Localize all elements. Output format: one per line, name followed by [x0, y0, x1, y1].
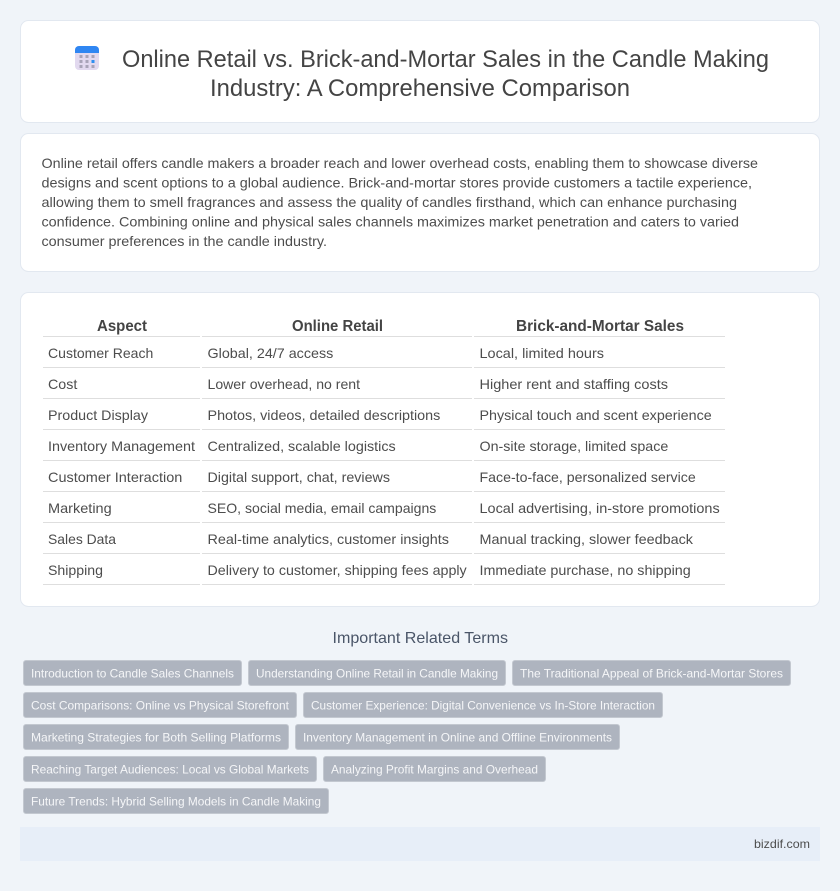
row: product display: Photos, videos, detailed descriptions — [208, 407, 440, 423]
tag — [24, 692, 296, 718]
tag: Reaching Target Audiences: Local vs Global Markets — [31, 762, 309, 776]
summary paragraph: designs and scent options to a global audience. Brick-and-mortar stores provide customers a tactile experience, — [42, 174, 752, 190]
summary paragraph: allowing them to smell fragrances and assess the quality of candles firsthand, which can enhance purchasing — [42, 194, 737, 210]
row: cost: Cost — [48, 376, 77, 392]
row: customer reach: Global, 24/7 access — [208, 345, 333, 361]
row: inventory management: Inventory Management — [48, 438, 195, 454]
title — [122, 46, 769, 102]
tag — [512, 660, 790, 686]
row: cost: Lower overhead, no rent — [208, 376, 360, 392]
row: customer interaction — [43, 469, 725, 492]
row: marketing: Local advertising, in-store promotions — [480, 500, 720, 516]
tag: Inventory Management in Online and Offline Environments — [303, 730, 612, 744]
row: shipping — [43, 562, 725, 585]
tag — [248, 660, 506, 686]
row: marketing — [43, 500, 725, 523]
tag: Cost Comparisons: Online vs Physical Storefront — [31, 698, 290, 712]
row: inventory management — [43, 438, 725, 461]
tag: Analyzing Profit Margins and Overhead — [331, 762, 538, 776]
panel: comparison table — [20, 292, 820, 606]
row: shipping: Shipping — [48, 562, 103, 578]
panel: header — [20, 20, 820, 122]
row: customer interaction: Face-to-face, personalized service — [480, 469, 696, 485]
tag: Understanding Online Retail in Candle Making — [256, 666, 498, 680]
row: customer reach — [43, 345, 725, 368]
summary paragraph: Online retail offers candle makers a broader reach and lower overhead costs, enabling them to showcase diverse — [42, 155, 758, 171]
tag: Introduction to Candle Sales Channels — [31, 666, 234, 680]
row: customer reach: Customer Reach — [48, 345, 153, 361]
footer bar — [20, 827, 820, 861]
table header row: Online Retail — [292, 318, 383, 335]
tag — [24, 756, 316, 782]
row: customer reach: Local, limited hours — [480, 345, 604, 361]
row: sales data: Manual tracking, slower feedback — [480, 531, 694, 547]
table header row: Aspect — [97, 318, 148, 335]
tag: Marketing Strategies for Both Selling Platforms — [31, 730, 281, 744]
row: inventory management: Centralized, scalable logistics — [208, 438, 396, 454]
heading: important related terms: Important Related Terms — [332, 630, 508, 647]
row: shipping: Delivery to customer, shipping fees apply — [208, 562, 467, 578]
row: product display: Product Display — [48, 407, 148, 423]
panel: summary text — [20, 134, 820, 272]
title: Online Retail vs. Brick-and-Mortar Sales in the Candle Making — [122, 46, 769, 73]
tag — [324, 756, 546, 782]
row: shipping: Immediate purchase, no shipping — [480, 562, 691, 578]
row: product display: Physical touch and scent experience — [480, 407, 712, 423]
row: sales data: Sales Data — [48, 531, 116, 547]
title: Industry: A Comprehensive Comparison — [210, 75, 630, 102]
tag — [304, 692, 662, 718]
summary paragraph — [42, 155, 758, 249]
row: inventory management: On-site storage, limited space — [480, 438, 669, 454]
row: customer interaction: Digital support, chat, reviews — [208, 469, 390, 485]
tag — [24, 660, 242, 686]
tag — [24, 788, 328, 814]
row: marketing: SEO, social media, email campaigns — [208, 500, 436, 516]
tag — [24, 724, 288, 750]
summary paragraph: consumer preferences in the candle industry. — [42, 233, 327, 249]
summary paragraph: confidence. Combining online and physical sales channels maximizes market penetration and caters to varied — [42, 214, 739, 230]
row: marketing: Marketing — [48, 500, 112, 516]
footer bar: bizdif.com — [754, 837, 810, 851]
tag: Customer Experience: Digital Convenience vs In-Store Interaction — [311, 698, 655, 712]
table header row — [43, 318, 725, 337]
tag: Future Trends: Hybrid Selling Models in Candle Making — [31, 794, 321, 808]
table header row: Brick-and-Mortar Sales — [516, 318, 684, 335]
icon: calendar — [75, 46, 99, 70]
tag: The Traditional Appeal of Brick-and-Mortar Stores — [520, 666, 783, 680]
row: cost: Higher rent and staffing costs — [480, 376, 668, 392]
row: cost — [43, 376, 725, 399]
row: sales data — [43, 531, 725, 554]
related terms tags — [24, 660, 790, 814]
row: sales data: Real-time analytics, customer insights — [208, 531, 449, 547]
row: product display — [43, 407, 725, 430]
tag — [296, 724, 620, 750]
row: customer interaction: Customer Interaction — [48, 469, 182, 485]
